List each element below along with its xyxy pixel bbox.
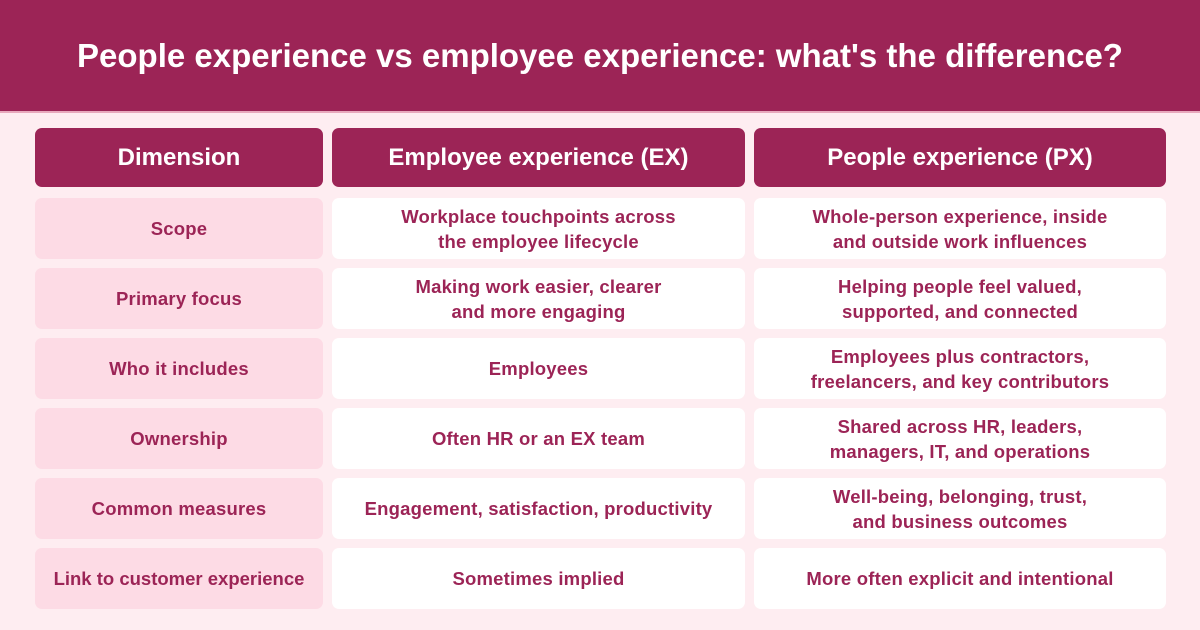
cell: scope EX bbox=[332, 198, 745, 259]
row: Link to customer experience: Link to customer experience bbox=[54, 568, 304, 589]
title bbox=[0, 0, 1200, 113]
header: EX: Employee experience (EX) bbox=[388, 144, 689, 171]
cell: focus EX: Making work easier, clearer bbox=[415, 276, 662, 296]
cell: scope PX: Whole-person experience, inside bbox=[812, 206, 1108, 226]
row: Ownership bbox=[35, 408, 323, 469]
row: Who it includes: Who it includes bbox=[109, 358, 249, 379]
cell: scope PX: and outside work influences bbox=[833, 230, 1087, 252]
header: PX bbox=[754, 128, 1166, 187]
cell: link EX: Sometimes implied bbox=[452, 568, 624, 589]
cell: includes PX: Employees plus contractors, bbox=[831, 346, 1089, 366]
cell: scope EX: Workplace touchpoints across bbox=[401, 206, 676, 226]
cell: includes PX bbox=[754, 338, 1166, 399]
cell: link EX bbox=[332, 548, 745, 609]
cell: includes EX: Employees bbox=[489, 358, 588, 379]
cell: ownership PX: managers, IT, and operations bbox=[830, 440, 1090, 462]
row: Primary focus: Primary focus bbox=[116, 288, 242, 309]
cell: focus EX bbox=[332, 268, 745, 329]
cell: focus PX bbox=[754, 268, 1166, 329]
cell: includes PX: freelancers, and key contributors bbox=[811, 370, 1109, 392]
header: Dimension: Dimension bbox=[118, 144, 240, 171]
row: Who it includes bbox=[35, 338, 323, 399]
header: PX: People experience (PX) bbox=[827, 144, 1093, 171]
cell: ownership PX bbox=[754, 408, 1166, 469]
cell: measures PX: and business outcomes bbox=[853, 510, 1067, 532]
row: Common measures: Common measures bbox=[92, 498, 266, 519]
row: Common measures bbox=[35, 478, 323, 539]
cell: focus PX: supported, and connected bbox=[842, 300, 1078, 322]
cell: scope EX: the employee lifecycle bbox=[438, 230, 639, 252]
row: Link to customer experience bbox=[35, 548, 323, 609]
cell: measures PX bbox=[754, 478, 1166, 539]
cell: measures EX: Engagement, satisfaction, productivity bbox=[365, 498, 712, 519]
cell: focus PX: Helping people feel valued, bbox=[838, 276, 1082, 296]
cell: scope PX bbox=[754, 198, 1166, 259]
cell: link PX: More often explicit and intentional bbox=[806, 568, 1114, 589]
cell: ownership EX bbox=[332, 408, 745, 469]
row: Ownership: Ownership bbox=[130, 428, 228, 449]
cell: includes EX bbox=[332, 338, 745, 399]
header: EX bbox=[332, 128, 745, 187]
header: Dimension bbox=[35, 128, 323, 187]
cell: ownership PX: Shared across HR, leaders, bbox=[838, 416, 1082, 436]
cell: measures PX: Well-being, belonging, trust, bbox=[833, 486, 1087, 506]
cell: ownership EX: Often HR or an EX team bbox=[432, 428, 645, 449]
cell: focus EX: and more engaging bbox=[451, 300, 626, 322]
row: Primary focus bbox=[35, 268, 323, 329]
row: Scope bbox=[35, 198, 323, 259]
title: People experience vs employee experience: what's the difference? bbox=[77, 36, 1123, 74]
row: Scope: Scope bbox=[151, 218, 207, 239]
cell: measures EX bbox=[332, 478, 745, 539]
cell: link PX bbox=[754, 548, 1166, 609]
